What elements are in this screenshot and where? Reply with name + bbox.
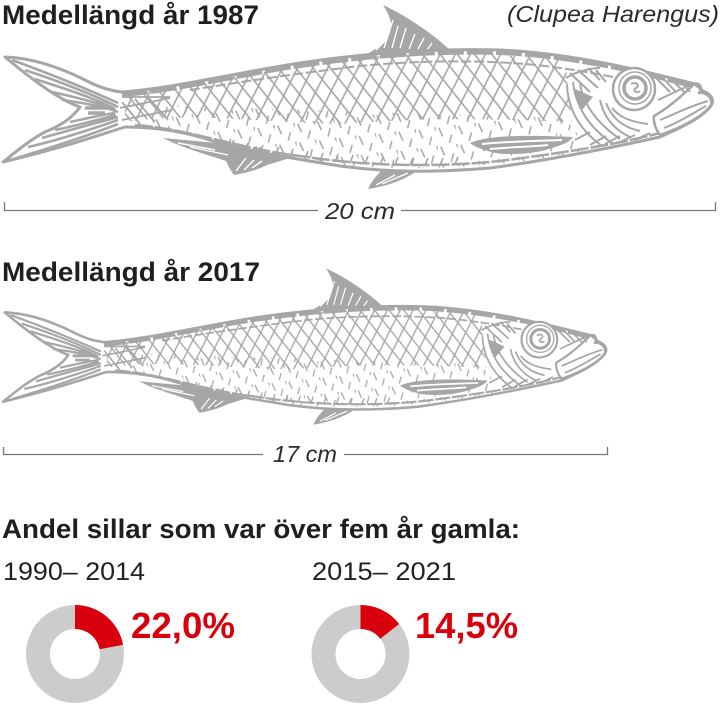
illustration: herring 1987	[3, 5, 713, 189]
scale bar: 17 cm: 17 cm	[273, 441, 337, 467]
scale bar: 20 cm	[4, 198, 716, 224]
donut chart: 14,5%	[324, 605, 399, 691]
value 22,0%: 22,0%	[131, 605, 235, 646]
title: Medellängd år 1987: Medellängd år 1987	[2, 0, 259, 30]
donut chart: 22,0%	[38, 605, 123, 691]
title: Medellängd år 2017: Medellängd år 2017	[2, 257, 260, 287]
period label 1990–2014: 1990– 2014	[3, 558, 145, 586]
value 14,5%: 14,5%	[415, 605, 518, 646]
species name: (Clupea Harengus)	[507, 1, 719, 27]
scale bar: 17 cm	[4, 441, 608, 467]
illustration: herring 2017	[3, 268, 606, 425]
scale bar: 20 cm: 20 cm	[324, 198, 395, 224]
period label 2015–2021: 2015– 2021	[312, 558, 456, 586]
heading: share of herring over five years: Andel sillar som var över fem år gamla:	[2, 514, 520, 544]
